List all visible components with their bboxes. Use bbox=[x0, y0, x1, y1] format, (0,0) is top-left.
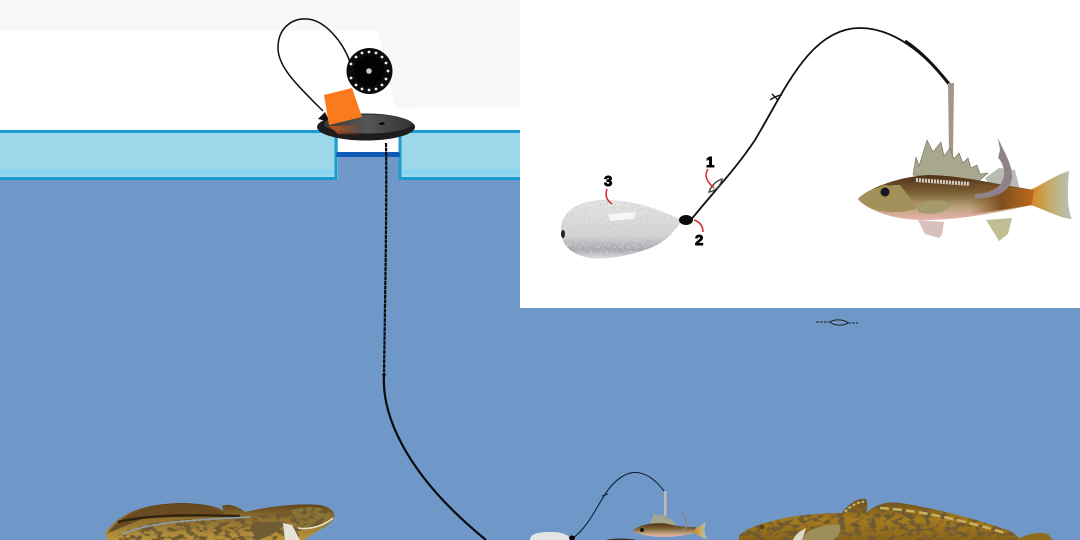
main fishing line bbox=[382, 143, 486, 540]
sky panel bbox=[0, 0, 520, 131]
inset: label 3: 3 bbox=[604, 173, 612, 190]
inset: hook shank bbox=[948, 83, 954, 155]
tip-up: spool reel bbox=[346, 48, 392, 94]
small rig: sinker bbox=[530, 532, 572, 540]
inset: label 2: 2 bbox=[695, 232, 703, 249]
white inset panel bbox=[520, 0, 1080, 308]
tip-up: round base bbox=[317, 112, 415, 140]
small rig: perch bbox=[632, 512, 707, 539]
inset: fishing line bbox=[690, 28, 949, 221]
knot floating in water bbox=[816, 320, 858, 325]
right burbot fish bbox=[739, 499, 1053, 540]
tip-up: orange flag bbox=[324, 88, 362, 125]
inset: label 1 bbox=[706, 154, 714, 188]
left burbot fish bbox=[105, 503, 334, 540]
inset: label 3 bbox=[604, 173, 612, 204]
small rig: dark strip of lower fish bbox=[606, 538, 636, 540]
ice layer with hole bbox=[0, 131, 520, 182]
small rig: hook shank bbox=[664, 491, 666, 516]
inset: label 1: 1 bbox=[706, 154, 714, 171]
inset: label 2 bbox=[694, 220, 703, 249]
inset: perch bbox=[858, 140, 1072, 241]
inset: sinker bbox=[561, 200, 682, 259]
inset: hook bbox=[975, 138, 1012, 199]
small rig: bead bbox=[569, 536, 575, 540]
tip-up: spool line bbox=[278, 19, 350, 111]
inset: swivel bead bbox=[679, 215, 693, 225]
small rig: line bbox=[573, 472, 664, 538]
